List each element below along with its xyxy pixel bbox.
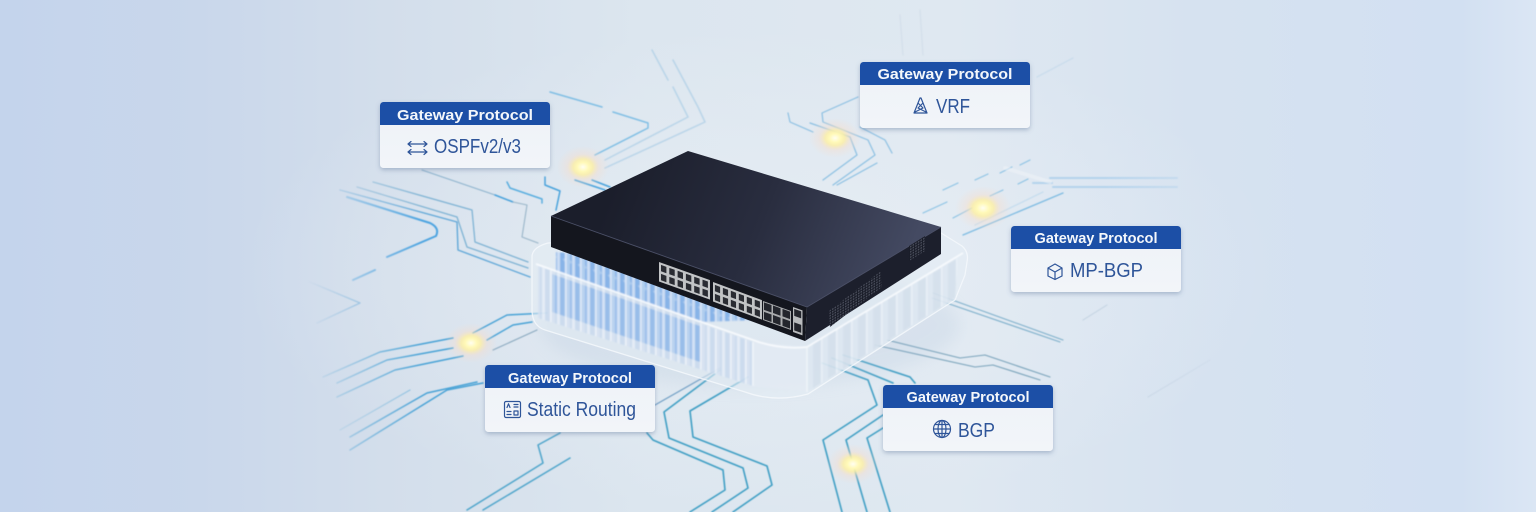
header label: Gateway Protocol — [878, 66, 1012, 83]
rear blue fins — [556, 252, 760, 322]
switch right face — [805, 227, 941, 341]
glowing node: bottom — [827, 444, 879, 484]
icon: table — [504, 402, 520, 418]
card value: BGP — [958, 420, 995, 442]
port block one — [659, 262, 710, 300]
front blue fins — [552, 274, 700, 362]
traces: lower left — [323, 313, 570, 510]
card header — [485, 365, 655, 388]
card: BGP — [883, 385, 1053, 451]
card header — [380, 102, 550, 125]
transparent acrylic base — [532, 228, 967, 398]
icon: arrows — [408, 142, 427, 154]
card value: VRF — [936, 96, 970, 118]
card value: OSPFv2/v3 — [434, 136, 521, 158]
header label: Gateway Protocol — [1034, 230, 1158, 247]
glowing node: top — [809, 118, 861, 158]
base top edge highlights — [536, 253, 963, 348]
front corner block — [753, 342, 807, 392]
traces: upper right — [788, 10, 1073, 185]
side vents — [829, 271, 882, 327]
header label: Gateway Protocol — [906, 389, 1030, 406]
port block two — [713, 282, 762, 320]
card header — [883, 385, 1053, 408]
card: Static Routing — [485, 365, 655, 432]
fins and highlights — [536, 252, 963, 392]
icon: cube — [1048, 264, 1062, 280]
traces: right bus — [923, 160, 1177, 235]
card: VRF — [860, 62, 1030, 128]
front pale fins — [538, 266, 753, 386]
glowing node: upper left — [557, 146, 609, 188]
traces: bottom centre — [647, 293, 1210, 512]
header label: Gateway Protocol — [508, 370, 632, 387]
base silhouette — [532, 228, 967, 398]
network switch — [551, 151, 941, 341]
SFP ports — [763, 301, 791, 330]
card header — [1011, 226, 1181, 249]
card: OSPFv2/v3 — [380, 102, 550, 168]
glowing node: lower left — [445, 323, 497, 363]
card: MP-BGP — [1011, 226, 1181, 292]
card value: Static Routing — [527, 399, 636, 421]
switch front face — [551, 216, 807, 341]
traces: upper left — [293, 50, 705, 323]
icon: globe — [934, 420, 950, 438]
switch top face — [551, 151, 941, 307]
card value: MP-BGP — [1070, 260, 1143, 282]
header label: Gateway Protocol — [397, 107, 533, 124]
icon: tower — [914, 98, 927, 113]
uplink ports — [793, 307, 802, 335]
card header — [860, 62, 1030, 85]
glowing node: right — [955, 186, 1011, 230]
right fins — [807, 258, 958, 392]
circuit traces — [293, 10, 1210, 512]
